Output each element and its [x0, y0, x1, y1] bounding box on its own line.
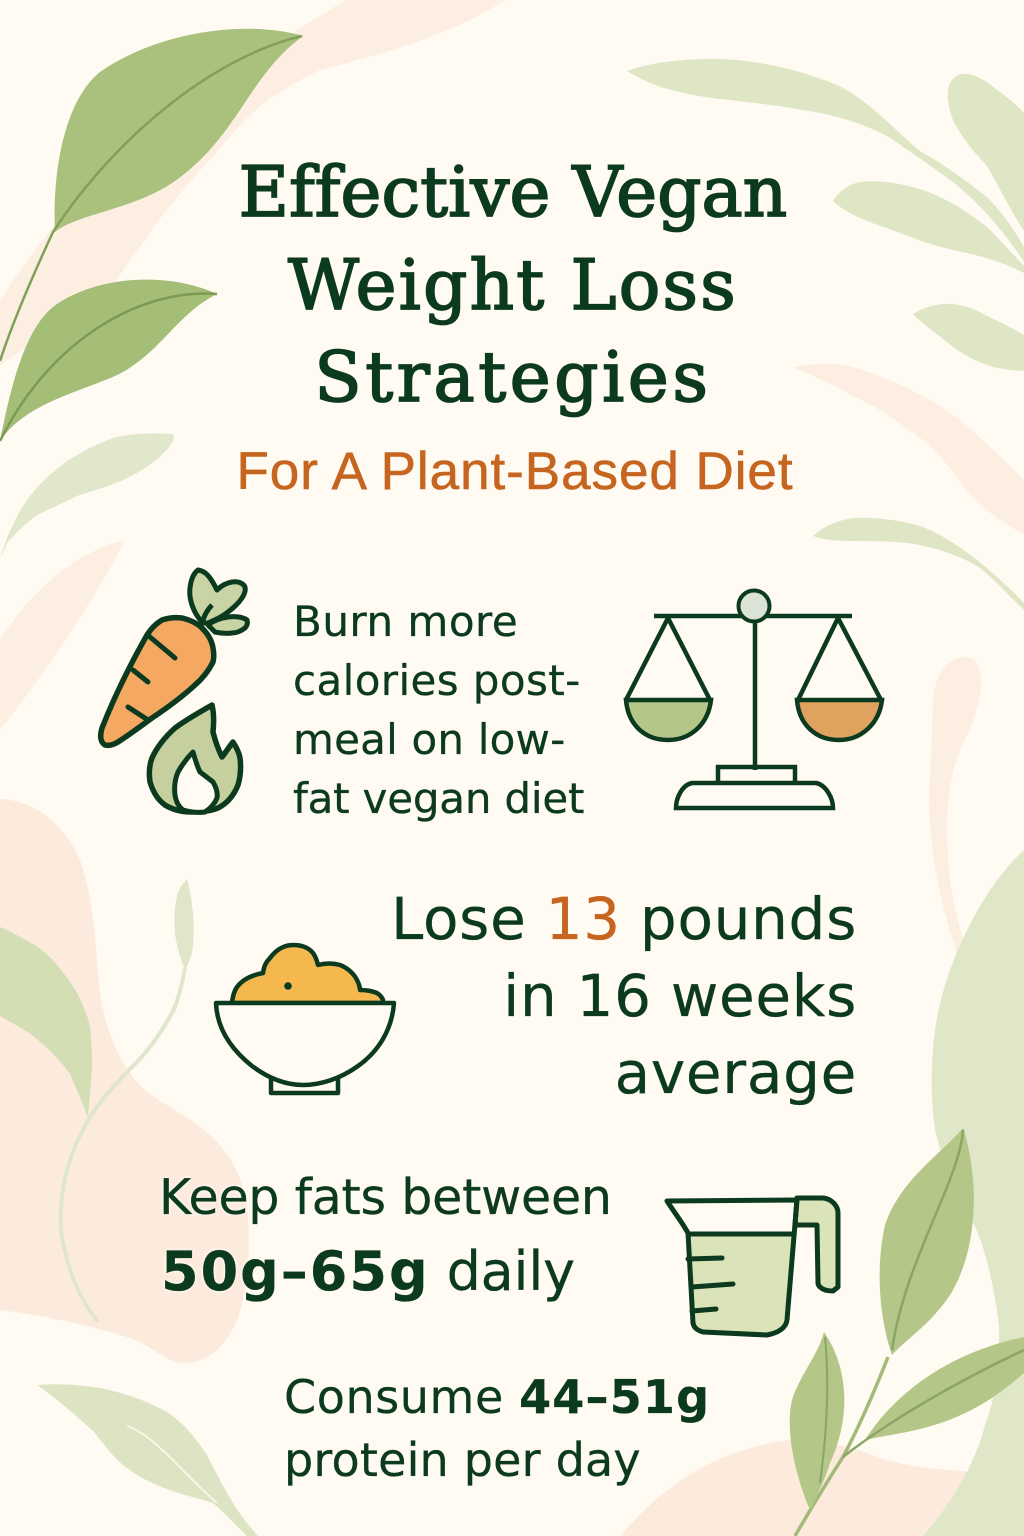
text: burn more calories: [293, 597, 584, 823]
leaf: large upper: [880, 1128, 974, 1355]
text: lose 13 pounds: [391, 885, 857, 1107]
text: lose 13 pounds: average: [615, 1039, 857, 1107]
leaf: top large: [0, 29, 303, 361]
bowl food: [232, 945, 383, 1003]
blob: right peach ribbon: [929, 657, 985, 1010]
subtitle: For A Plant-Based Diet: [236, 442, 794, 501]
blob: large left peach shape: [0, 799, 249, 1363]
text: consume protein: Consume 44–51g: [284, 1370, 710, 1424]
food dot: [284, 982, 292, 990]
bowl foot: [271, 1078, 338, 1093]
cup outline: [667, 1200, 797, 1335]
text: keep fats: 50g–65g daily: [161, 1240, 575, 1303]
text: keep fats: [159, 1169, 612, 1303]
cup tick marks: [688, 1258, 733, 1311]
text: consume protein: [284, 1370, 710, 1487]
text: lose 13 pounds: Lose 13 pounds: [391, 885, 857, 953]
text: lose 13 pounds: in 16 weeks: [503, 962, 857, 1030]
leaf: top right corner: [948, 74, 1024, 231]
flame inner: [175, 752, 217, 812]
carrot body: [101, 618, 214, 745]
text: burn more calories: fat vegan diet: [293, 774, 584, 823]
flame: [149, 705, 241, 812]
leaf: left green: [0, 927, 92, 1117]
right pan: [797, 700, 882, 740]
leaf: right: [843, 1337, 1024, 1457]
leaf: small: [790, 1332, 844, 1510]
text: burn more calories: calories post-: [293, 656, 581, 705]
leaf: bottom left pale: [37, 1384, 258, 1536]
blob: bottom peach shape: [620, 1440, 1000, 1536]
text: burn more calories: meal on low-: [293, 715, 565, 764]
text: burn more calories: Burn more: [293, 597, 518, 646]
leaf: left pale: [0, 433, 174, 560]
beam and post: [654, 616, 852, 770]
carrot leaves: [190, 570, 247, 633]
blob: right peach streak: [793, 364, 1024, 534]
carrot stripes: [128, 637, 175, 720]
leaf: right small: [913, 304, 1024, 371]
title: Effective Vegan: [239, 153, 787, 233]
blob: left peach leaf: [0, 540, 125, 730]
bowl body: [216, 1003, 394, 1085]
left pan: [626, 700, 711, 740]
leaf: top right long: [627, 59, 1024, 262]
title: Weight Loss: [288, 246, 738, 326]
pivot: [738, 590, 770, 622]
blob: top left peach band: [0, 0, 505, 365]
leaf: upper right middle: [833, 181, 1024, 273]
leaf: second: [0, 280, 217, 441]
pan strings: [626, 618, 881, 700]
cup handle: [795, 1198, 838, 1291]
blob: right green shape: [923, 850, 1024, 1536]
sprout: stem and leaf: [61, 879, 194, 1322]
leaf: right lower: [813, 518, 1024, 610]
title: [239, 153, 787, 418]
base: [676, 767, 833, 808]
cup liquid: [688, 1234, 795, 1335]
stem: [795, 1357, 888, 1536]
title: Strategies: [314, 338, 712, 418]
text: keep fats: Keep fats between: [159, 1169, 612, 1226]
text: consume protein: protein per day: [284, 1433, 641, 1487]
